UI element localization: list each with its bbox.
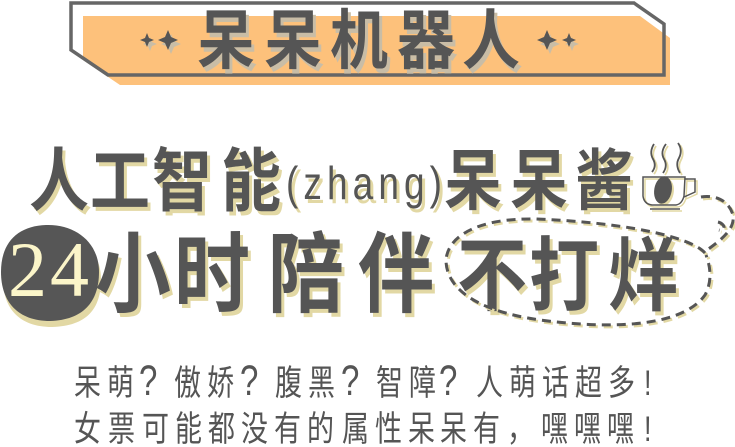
heading: artificial intelligence: 人工智能 bbox=[29, 142, 281, 220]
heading: daidai jiang: 呆呆酱 bbox=[444, 144, 633, 219]
banner bbox=[71, 3, 670, 85]
icon: coffee cup bbox=[643, 143, 695, 209]
sparkles left bbox=[140, 30, 178, 50]
heading line 2 bbox=[95, 227, 678, 324]
banner orange background bbox=[83, 16, 670, 85]
banner frame bbox=[71, 3, 664, 75]
description line 1: 呆萌? 傲娇? 腹黑? 智障? 人萌话超多! bbox=[74, 357, 652, 405]
heading: never closes: 不打烊 bbox=[457, 231, 678, 321]
banner title: 呆呆机器人 bbox=[197, 5, 520, 78]
dashed speech bubble bbox=[446, 196, 733, 325]
circle bbox=[3, 234, 101, 327]
badge: 24 circle bbox=[1, 225, 101, 327]
heading: pinyin zhang: (zhang) bbox=[286, 157, 442, 209]
description text bbox=[74, 357, 652, 447]
heading line 1 bbox=[29, 142, 633, 220]
number 24: 24 bbox=[8, 226, 89, 313]
heading: 24-hour company: 小时陪伴 bbox=[95, 227, 434, 324]
sparkles right bbox=[537, 30, 576, 50]
